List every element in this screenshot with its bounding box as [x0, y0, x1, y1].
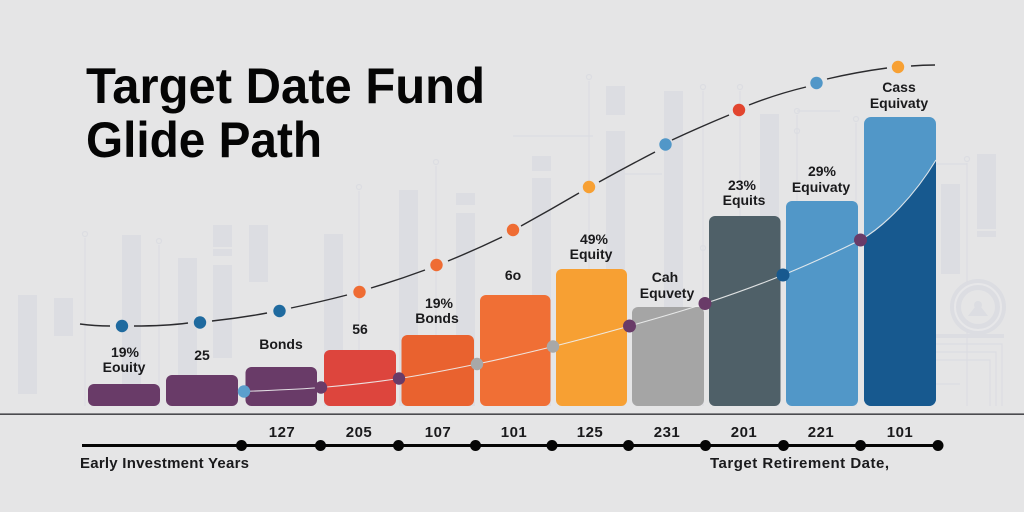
timeline values: 101 — [501, 424, 527, 441]
upper glide path curve with markers — [80, 61, 935, 332]
bar labels: 25 — [194, 347, 210, 363]
bar 7 — [556, 269, 627, 406]
title: Glide Path — [86, 112, 322, 168]
bar 4 — [324, 350, 396, 406]
timeline values: 201 — [731, 424, 757, 441]
bar labels: 19% — [425, 295, 454, 311]
bar labels: Bonds — [259, 336, 303, 352]
bar labels: 49% — [580, 231, 609, 247]
bar 1 — [88, 384, 160, 406]
bar labels: Equivaty — [792, 179, 850, 195]
timeline values: 107 — [425, 424, 451, 441]
bar 3 — [246, 367, 317, 406]
timeline values: 101 — [887, 424, 913, 441]
timeline values — [269, 424, 913, 441]
title — [86, 58, 485, 168]
bar 11 dark area — [860, 160, 936, 406]
faint background chart pattern — [18, 74, 1006, 406]
timeline end label: Target Retirement Date, — [710, 455, 889, 472]
title: Target Date Fund — [86, 58, 485, 114]
timeline values: 205 — [346, 424, 372, 441]
bar labels: 19% — [111, 344, 140, 360]
bar labels — [103, 79, 928, 375]
bar 9 — [709, 216, 780, 406]
timeline values: 125 — [577, 424, 603, 441]
bar labels: 56 — [352, 321, 368, 337]
bar 5 — [402, 335, 474, 406]
timeline start label: Early Investment Years — [80, 455, 249, 472]
bar labels: 6o — [505, 267, 521, 283]
bar labels: Bonds — [415, 310, 459, 326]
timeline values: 231 — [654, 424, 680, 441]
bar labels: Equivaty — [870, 95, 928, 111]
bar labels: Cah — [652, 269, 678, 285]
bar 6 — [480, 295, 550, 406]
timeline with ticks — [82, 440, 944, 451]
bar 8 — [632, 307, 704, 406]
lower white allocation curve with markers — [238, 160, 936, 398]
bar labels: Eouity — [103, 359, 146, 375]
bar labels: Equvety — [640, 285, 694, 301]
bar labels: 23% — [728, 177, 757, 193]
bar labels: Cass — [882, 79, 916, 95]
bar labels: Equity — [570, 246, 613, 262]
baseline axis — [0, 414, 1024, 415]
timeline values: 221 — [808, 424, 834, 441]
bar 10 — [786, 201, 858, 406]
stacked allocation bars — [88, 117, 936, 406]
bar labels: 29% — [808, 163, 837, 179]
timeline values: 127 — [269, 424, 295, 441]
bar labels: Equits — [723, 192, 766, 208]
bar 11 — [864, 117, 936, 406]
bar 2 — [166, 375, 238, 406]
